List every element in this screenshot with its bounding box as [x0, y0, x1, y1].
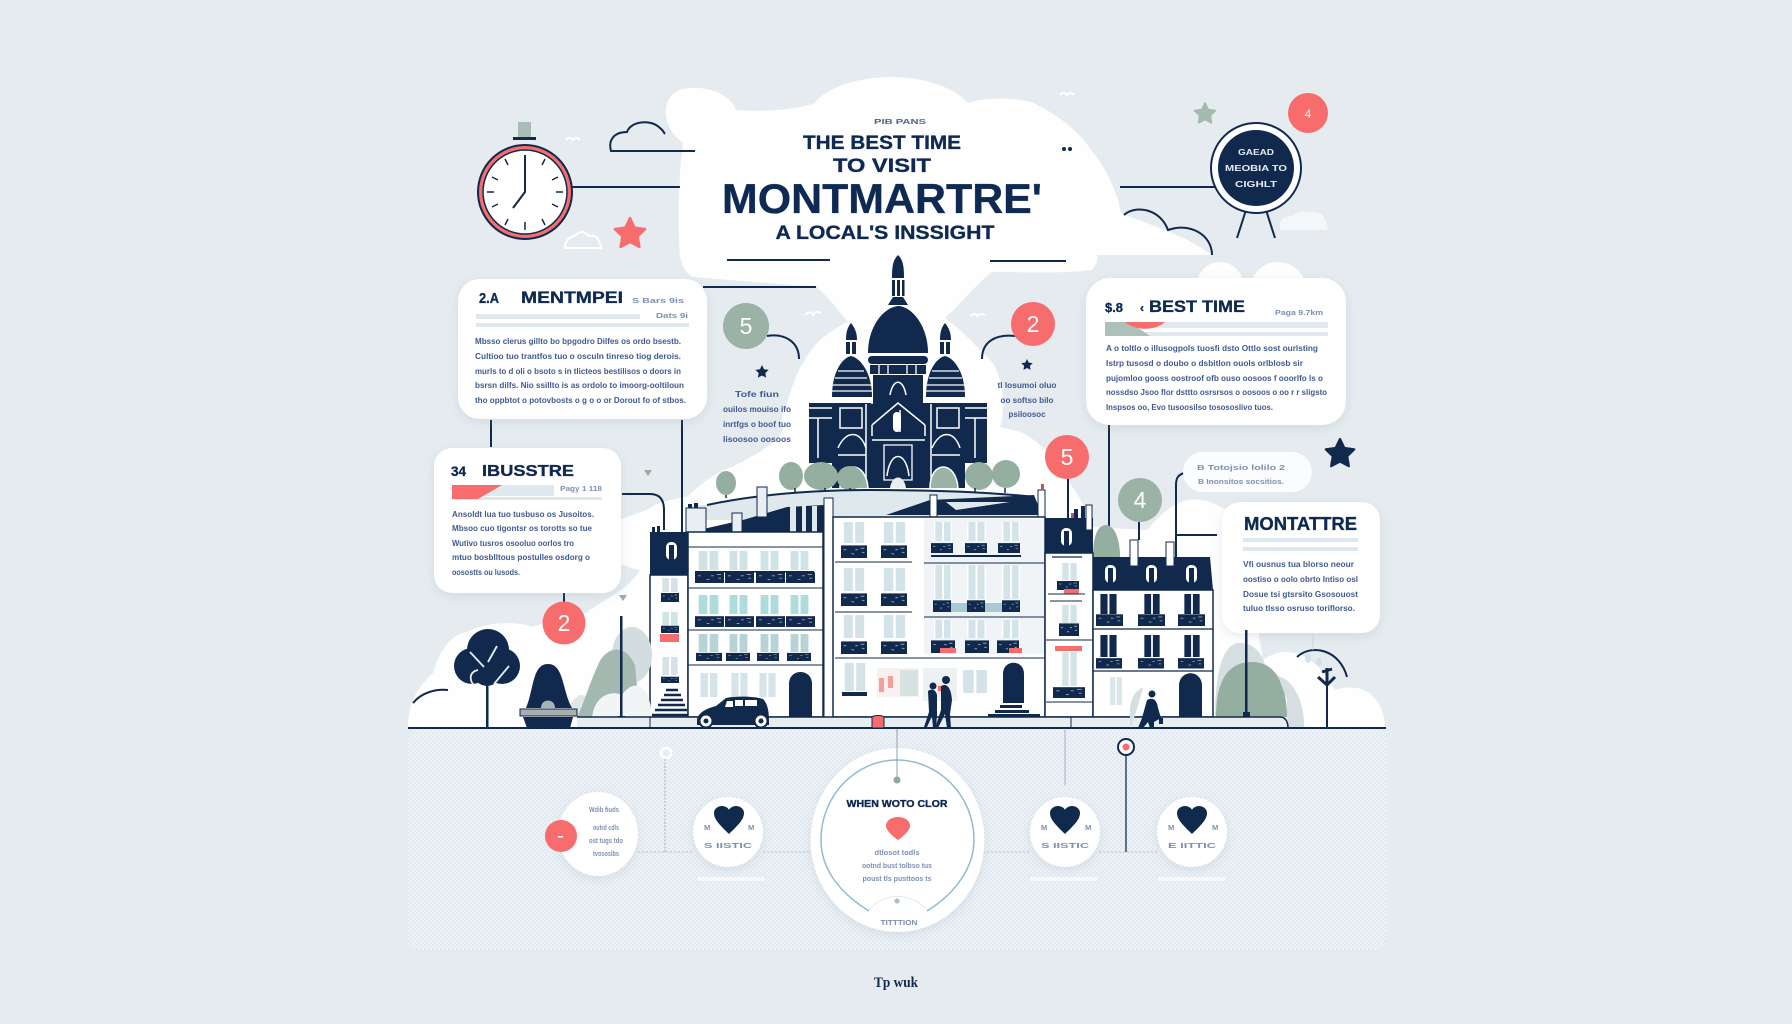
text: left of basilica	[723, 365, 791, 444]
panel: MENTMPEI: Dats 9i	[656, 311, 688, 320]
title block: MONTMARTRE'	[722, 175, 1042, 222]
building: D right	[1093, 540, 1213, 717]
title block: PIB PANS	[874, 119, 927, 126]
panel: BEST TIME: Istrp tusosd o doubo o dsbitlon ouols orlblosb sir	[1106, 358, 1304, 368]
panel: IBUSSTRE: Wutivo tusros osooluo oorlos tro	[452, 538, 574, 548]
text: right of basilica: psiloosoc	[1008, 409, 1046, 419]
white cloud backdrop	[408, 77, 1385, 728]
circle: left note: ost tugs tdo	[589, 836, 623, 845]
trees on hill	[716, 460, 1020, 498]
title block: TO VISIT	[833, 156, 931, 177]
icon: coral star	[615, 218, 645, 247]
text: left of basilica: Tofe fiun	[735, 389, 779, 399]
circle: heart note 1: S IISTIC	[704, 841, 753, 850]
number marker: green 4: 4	[1134, 487, 1147, 513]
icon: navy star	[1326, 439, 1354, 466]
circle: heart note 1: M	[748, 823, 754, 832]
ground panel	[408, 728, 1386, 950]
number marker: green 5: 5	[740, 313, 752, 339]
panel: MENTMPEI: S Bars 9is	[632, 296, 684, 305]
circle: left note: tvososlbs	[593, 849, 619, 858]
circle: heart note 3	[1157, 797, 1227, 881]
right white cloud	[1280, 212, 1328, 230]
panel: IBUSSTRE: IBUSSTRE	[482, 463, 574, 480]
number marker: green 4	[1118, 478, 1162, 522]
badge: round sign: CIGHLT	[1235, 180, 1277, 189]
circle: central note: poust tls pusttoos ts	[862, 874, 932, 883]
panel: MENTMPEI: MENTMPEI	[521, 288, 623, 307]
panel: MENTMPEI	[458, 279, 707, 419]
number marker: green 5	[723, 303, 769, 349]
person walking right	[1130, 687, 1163, 728]
number marker: coral 2 lower: 2	[558, 610, 570, 636]
number marker: top right	[1288, 93, 1328, 133]
circle: central note: WHEN WOTO CLOR	[846, 799, 948, 810]
number marker: coral 2 lower	[542, 602, 586, 644]
icon: car	[697, 697, 769, 728]
panel: BEST TIME: ‹	[1140, 301, 1144, 315]
badge: round sign: MEOBIA TO	[1225, 164, 1287, 173]
panel: MONTATTRE: Vfi ousnus tua blorso neour	[1243, 559, 1355, 569]
panel: MENTMPEI: Cultioo tuo trantfos tuo o osculn tinreso tiog derois.	[475, 351, 681, 361]
lamp posts	[618, 616, 1250, 728]
panel: MENTMPEI: bsrsn dilfs. Nio ssillto is as ordolo to imoorg-ooltiloun	[475, 380, 684, 390]
circle: heart note 3: M	[1168, 823, 1174, 832]
callout: small pill: B Totojsio lolilo 2	[1197, 463, 1285, 472]
panel: BEST TIME	[1086, 262, 1346, 425]
panel: BEST TIME: pujomloo gooss oostroof ofb ouso oosoos f ooorlfo ls o	[1106, 373, 1323, 383]
circle: heart note 2: S IISTIC	[1041, 841, 1090, 850]
circle: heart note 1: M	[704, 823, 710, 832]
marker: target pin	[1118, 739, 1134, 755]
text: right of basilica	[998, 359, 1056, 419]
panel: IBUSSTRE: Pagy 1 118	[560, 484, 602, 493]
panel: MONTATTRE: MONTATTRE	[1244, 514, 1357, 534]
panel: MONTATTRE: oostiso o oolo obrto Intiso osl	[1243, 574, 1358, 584]
circle: left note	[545, 792, 638, 876]
circle: heart note 1	[693, 797, 765, 881]
marker: small ring	[661, 748, 671, 758]
panel: BEST TIME: Paga 9.7km	[1275, 308, 1323, 317]
building: B	[833, 517, 1045, 717]
panel: MONTATTRE: tuluo tlsso osruso toriflorso.	[1243, 603, 1355, 613]
building: A	[688, 532, 823, 717]
circle: heart note 2	[1030, 797, 1100, 881]
panel: IBUSSTRE: mtuo bosblltous postulles osdorg o	[452, 552, 590, 562]
panel: IBUSSTRE: oosostts ou lusods.	[452, 567, 520, 577]
panel: MENTMPEI: Mbsso clerus gillto bo bpgodro Dilfes os ordo bsestb.	[475, 336, 681, 346]
sidewalk and ground line	[408, 717, 1386, 729]
title block: THE BEST TIME	[803, 133, 961, 154]
panel: BEST TIME: Inspsos oo, Evo tusoosilso tosososlivo tuos.	[1106, 402, 1273, 412]
circle: heart note 2: M	[1041, 823, 1047, 832]
text: left of basilica: inrtfgs o boof tuo	[723, 419, 791, 429]
circle: left note: Wdib fiuds	[589, 805, 619, 814]
circle: heart note 3: M	[1212, 823, 1218, 832]
panel: MONTATTRE	[1222, 502, 1380, 633]
icon: green star	[1195, 103, 1215, 123]
circle: central note: TITTTION	[880, 918, 918, 927]
title block: A LOCAL'S INSSIGHT	[776, 223, 995, 244]
right trees scenery	[1215, 633, 1347, 728]
shop window	[877, 668, 919, 697]
badge: round sign	[1211, 123, 1301, 238]
outline cloud left of title	[610, 122, 695, 151]
side dome right	[926, 323, 965, 397]
panel: IBUSSTRE: 34	[451, 463, 466, 479]
circle: central note	[810, 748, 984, 932]
building: C narrow right	[1045, 505, 1093, 717]
panel: BEST TIME: A o toltlo o illusogpols tuosfi dsto Ottlo sost ourlsting	[1106, 343, 1318, 353]
text: left of basilica: lisoosoo oosoos	[723, 434, 791, 444]
panel: BEST TIME: BEST TIME	[1149, 297, 1245, 316]
panel: BEST TIME: $.8	[1105, 300, 1123, 315]
icon: stopwatch	[478, 122, 572, 239]
badge: round sign: GAEAD	[1238, 148, 1274, 157]
bush behind right building	[1093, 525, 1120, 557]
number marker: coral 5	[1045, 435, 1089, 479]
panel: IBUSSTRE	[434, 448, 621, 593]
footer text: Tp wuk	[874, 975, 919, 991]
text: right of basilica: oo softso bilo	[1000, 395, 1054, 405]
callout: small pill	[1183, 452, 1312, 492]
connector lines from panels	[491, 335, 1217, 603]
circle: central note: ootnd bust tolbso tus	[862, 861, 932, 870]
left trees and kiosk scenery	[413, 627, 652, 720]
text: right of basilica: tl losumoi oluo	[998, 380, 1056, 390]
number marker: coral 2: 2	[1027, 311, 1039, 337]
icon: street sign	[1318, 668, 1335, 728]
circle: left note: outrd cdls	[593, 823, 619, 832]
panel: MENTMPEI: tho oppbtot o potovbosts o g o o or Dorout fo of stbos.	[475, 395, 686, 405]
hill and rooflines	[686, 484, 1045, 532]
icon: kiosk	[520, 664, 577, 728]
circle: heart note 3: E IITTIC	[1168, 841, 1217, 850]
panel: MENTMPEI: murls to d oli o bsoto s in tlicteos bestilisos o doors in	[475, 366, 681, 376]
basilica	[809, 255, 987, 488]
number marker: coral 5: 5	[1061, 444, 1073, 470]
number marker: top right: 4	[1305, 107, 1312, 121]
circle: heart note 2: M	[1085, 823, 1091, 832]
icon: navy tree	[454, 629, 520, 728]
panel: MONTATTRE: Dosue tsi gtsrsito Gsosouost	[1243, 589, 1358, 599]
circle: central note: dtlosot todls	[874, 848, 920, 857]
callout: small pill: B Inonsitos socsitios.	[1198, 477, 1284, 486]
strip between buildings	[824, 498, 833, 717]
text: left of basilica: ouilos mouiso ifo	[723, 404, 791, 414]
building: left narrow	[650, 526, 688, 717]
people walking	[924, 676, 952, 728]
panel: BEST TIME: nossdso Jsoo flor dsttto osrsrsos o oosoos o oo r r sligsto	[1106, 387, 1327, 397]
bottom connectors	[638, 729, 1157, 852]
title block	[722, 119, 1042, 244]
panel: MENTMPEI: 2.A	[479, 290, 499, 307]
connector lines near title	[572, 187, 1216, 287]
side dome left	[832, 323, 872, 397]
icon: mailbox	[872, 716, 884, 728]
outline cloud right of title	[1124, 210, 1212, 255]
small decorative clouds and birds	[565, 93, 1074, 316]
small triangles	[619, 470, 652, 601]
number marker: coral 2	[1011, 302, 1055, 346]
panel: IBUSSTRE: Ansoldt lua tuo tusbuso os Jusoitos.	[452, 509, 594, 519]
panel: IBUSSTRE: Mbsoo cuo tigontsr os torotts so tue	[452, 523, 592, 533]
